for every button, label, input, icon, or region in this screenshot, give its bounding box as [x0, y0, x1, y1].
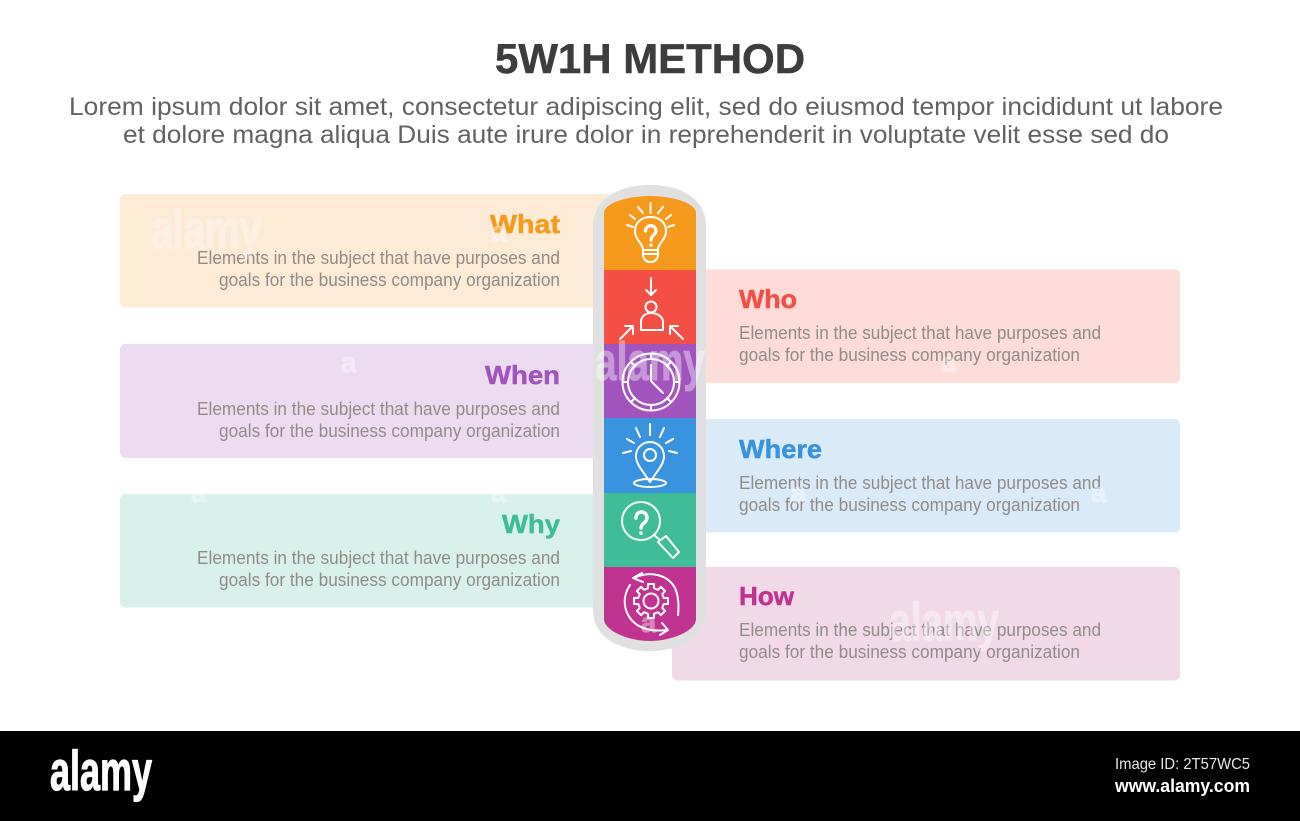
- watermark overlays: a: [341, 347, 356, 378]
- icon: location pin: [623, 424, 677, 487]
- subtitle text: et dolore magna aliqua Duis aute irure dolor in reprehenderit in voluptate velit esse sed do: [123, 121, 1169, 149]
- text: what description: [197, 247, 560, 290]
- text: how description: [739, 619, 1101, 662]
- segment: where: [604, 418, 696, 493]
- text: how description: goals for the business company organization: [739, 641, 1080, 662]
- watermark overlays: a: [641, 607, 656, 638]
- text: when description: Elements in the subject that have purposes and: [197, 398, 560, 419]
- text: why description: Elements in the subject that have purposes and: [197, 547, 560, 568]
- subtitle text: Lorem ipsum dolor sit amet, consectetur adipiscing elit, sed do eiusmod tempor incididunt ut labore: [69, 93, 1223, 121]
- watermark overlays: a: [491, 216, 506, 247]
- text: why description: [197, 547, 560, 590]
- icon: magnifier with question mark: [622, 502, 679, 558]
- footer bar: [0, 731, 1300, 821]
- segment: what: [604, 196, 696, 270]
- text: when description: goals for the business company organization: [219, 420, 560, 441]
- heading: who: Who: [739, 284, 797, 314]
- text: why description: goals for the business company organization: [219, 569, 560, 590]
- heading: where: Where: [739, 434, 822, 464]
- icon: person with arrows: [620, 278, 683, 339]
- text: who description: [739, 322, 1101, 365]
- icon: clock: [622, 354, 680, 410]
- text: where description: [739, 472, 1101, 515]
- watermark overlays: a: [941, 347, 956, 378]
- text: what description: Elements in the subject that have purposes and: [197, 247, 560, 268]
- subtitle text: [69, 93, 1223, 149]
- watermark overlays: alamy: [151, 200, 261, 260]
- text: what description: goals for the business company organization: [219, 269, 560, 290]
- text: how description: Elements in the subject that have purposes and: [739, 619, 1101, 640]
- watermark overlays: a: [791, 477, 806, 508]
- text: where description: goals for the business company organization: [739, 494, 1080, 515]
- text: who description: Elements in the subject that have purposes and: [739, 322, 1101, 343]
- image id: Image ID: 2T57WC5: [1115, 756, 1250, 773]
- heading: why: Why: [502, 509, 561, 539]
- watermark overlays: alamy: [595, 332, 705, 392]
- icon: gear with rotating arrows: [625, 573, 679, 635]
- text: where description: Elements in the subject that have purposes and: [739, 472, 1101, 493]
- website: www.alamy.com: [1114, 776, 1250, 796]
- heading: when: When: [485, 360, 560, 390]
- text: who description: goals for the business company organization: [739, 344, 1080, 365]
- panel: what: [120, 194, 620, 308]
- title: 5W1H METHOD: [495, 35, 805, 82]
- central capsule column: [593, 185, 706, 651]
- watermark overlays: a: [1091, 477, 1106, 508]
- watermark overlays: a: [491, 477, 506, 508]
- segment: how: [604, 567, 696, 641]
- heading: how: How: [739, 581, 795, 611]
- panel: where: [672, 419, 1180, 532]
- segment: who: [604, 270, 696, 344]
- watermark overlays: a: [191, 477, 206, 508]
- segment: why: [604, 493, 696, 567]
- panel: why: [120, 494, 620, 608]
- icon: light bulb with question mark: [627, 203, 674, 262]
- text: when description: [197, 398, 560, 441]
- footer logo: alamy: [50, 739, 152, 802]
- watermark overlays: [151, 200, 1106, 652]
- panel: who: [672, 270, 1180, 383]
- panel: when: [120, 344, 620, 458]
- watermark overlays: alamy: [889, 592, 999, 652]
- segment: when: [604, 344, 696, 418]
- heading: what: What: [490, 209, 560, 239]
- panel: how: [672, 567, 1180, 680]
